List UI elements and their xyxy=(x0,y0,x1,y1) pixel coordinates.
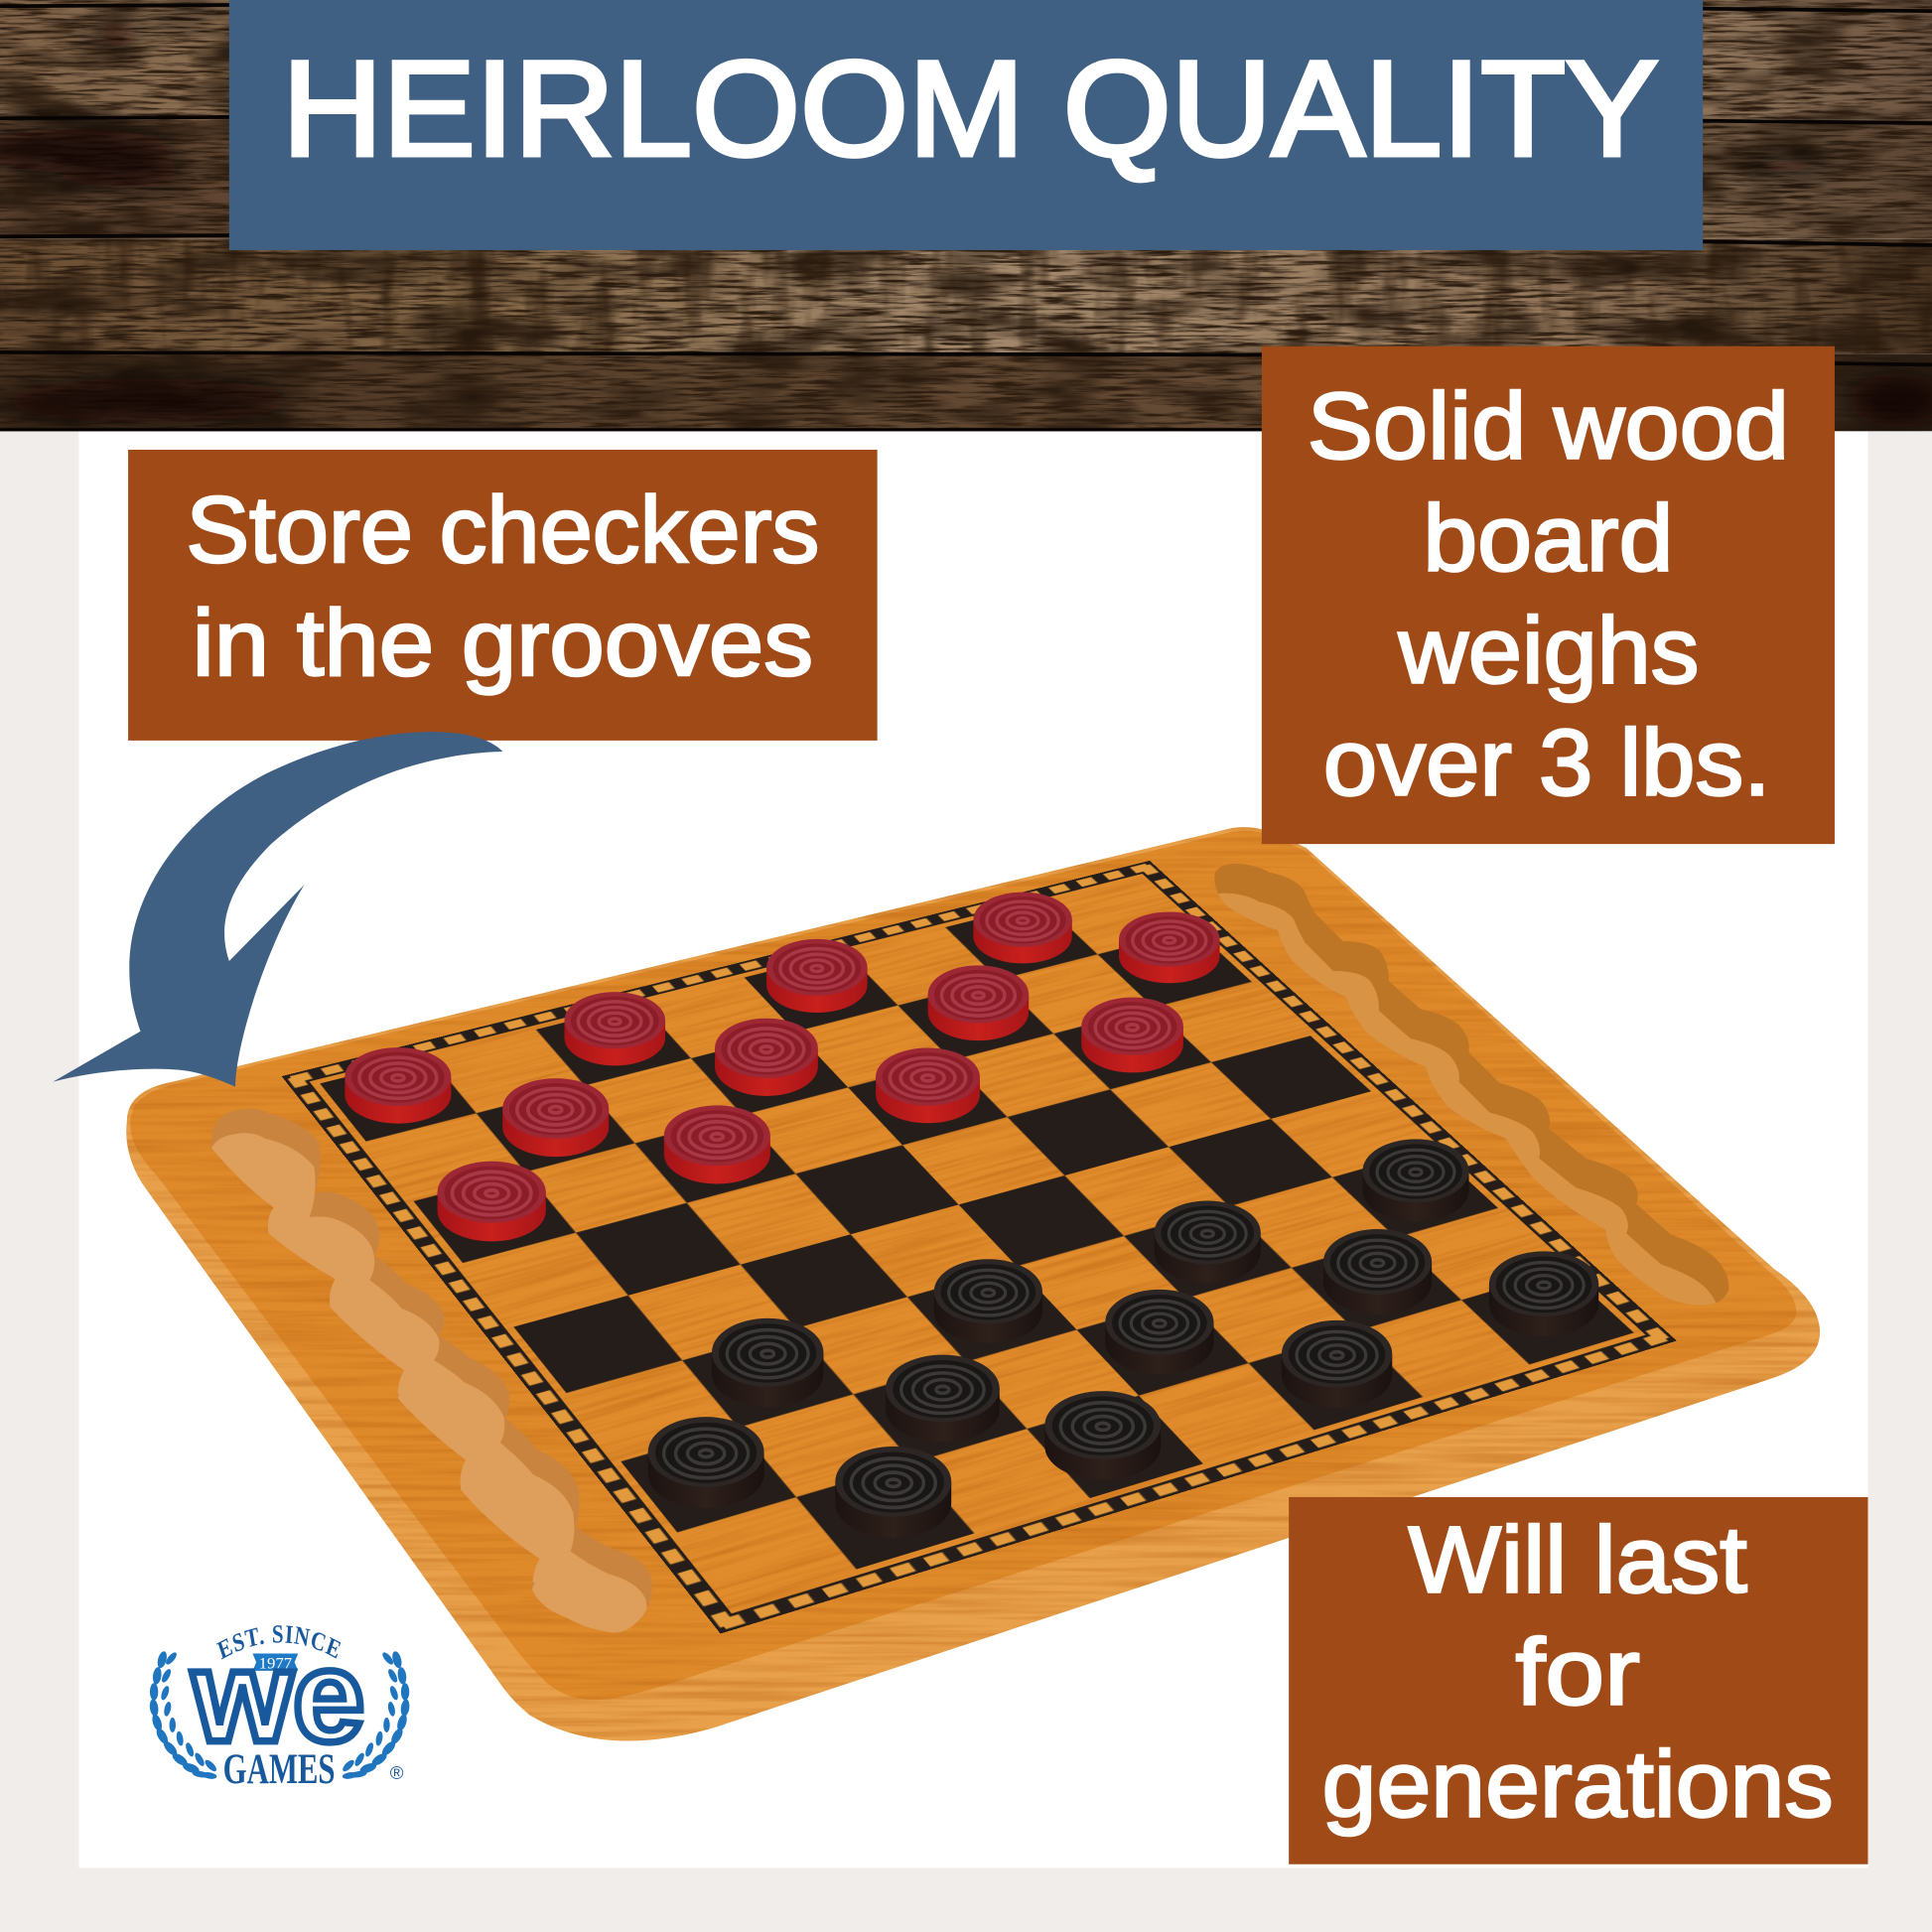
callout text: board xyxy=(1423,486,1673,591)
red checker 9 xyxy=(876,1047,980,1123)
title text: HEIRLOOM QUALITY xyxy=(282,32,1658,184)
red checkers xyxy=(345,893,1220,1241)
callout text: weighs xyxy=(1398,599,1699,703)
black checker 10 xyxy=(1044,1391,1161,1480)
wooden game board xyxy=(126,827,1820,1741)
callout: solid wood xyxy=(1262,346,1835,844)
red checker 11 xyxy=(664,1105,770,1183)
callout: will last xyxy=(1289,1497,1867,1864)
playing field xyxy=(310,874,1646,1613)
black checkers xyxy=(648,1139,1598,1538)
red checker 2 xyxy=(1119,911,1220,983)
black checker 1 xyxy=(1362,1139,1469,1221)
wood plank banner xyxy=(0,0,1932,431)
black checker 3 xyxy=(1323,1229,1432,1314)
checkerboard printed in perspective xyxy=(282,861,1676,1634)
logo year ribbon: 1977 xyxy=(259,1655,292,1672)
left storage groove xyxy=(210,1108,652,1632)
logo year ribbon xyxy=(252,1654,298,1672)
black checker 7 xyxy=(1282,1320,1392,1408)
red checker 8 xyxy=(345,1047,451,1124)
black checker 12 xyxy=(835,1447,951,1538)
board edge lip xyxy=(126,827,1820,1741)
callout text: generations xyxy=(1322,1731,1834,1836)
callout text: over 3 lbs. xyxy=(1323,710,1770,814)
frame xyxy=(282,861,1677,1634)
red checker 10 xyxy=(502,1078,609,1157)
red checker 12 xyxy=(438,1162,546,1241)
black checker 2 xyxy=(1155,1200,1261,1284)
red checker 7 xyxy=(715,1019,818,1096)
red checker 4 xyxy=(928,965,1029,1040)
callout text xyxy=(1308,374,1789,814)
logo left laurel xyxy=(149,1650,218,1780)
logo games: GAMES xyxy=(223,1745,336,1793)
red checker 1 xyxy=(973,893,1072,963)
logo registered mark: ® xyxy=(390,1762,404,1783)
logo: WE Games xyxy=(149,1623,409,1793)
black checker 8 xyxy=(712,1318,823,1407)
callout text xyxy=(186,478,819,695)
callout text: for xyxy=(1516,1619,1640,1724)
callout text: Store checkers xyxy=(186,478,819,582)
right storage groove xyxy=(1214,864,1729,1305)
callout text xyxy=(1322,1507,1834,1836)
logo est since: EST. SINCE xyxy=(216,1625,342,1660)
arrow: points to groove xyxy=(53,732,502,1087)
red checker 6 xyxy=(1081,998,1183,1072)
red checker 5 xyxy=(565,992,665,1065)
callout text: Solid wood xyxy=(1308,374,1789,479)
callout: store checkers xyxy=(128,450,878,741)
black checker 11 xyxy=(648,1417,764,1508)
black checker 4 xyxy=(1489,1251,1598,1336)
black checker 5 xyxy=(934,1259,1042,1343)
logo right laurel xyxy=(341,1650,410,1780)
title banner xyxy=(229,0,1703,250)
black checker 6 xyxy=(1105,1290,1213,1374)
logo we mark: we xyxy=(192,1623,364,1769)
board top surface xyxy=(130,831,1796,1700)
white panel xyxy=(78,431,1867,1867)
red checker 3 xyxy=(766,939,868,1013)
callout text: in the grooves xyxy=(193,591,813,695)
callout text: Will last xyxy=(1409,1507,1747,1611)
black checker 9 xyxy=(886,1355,1000,1443)
